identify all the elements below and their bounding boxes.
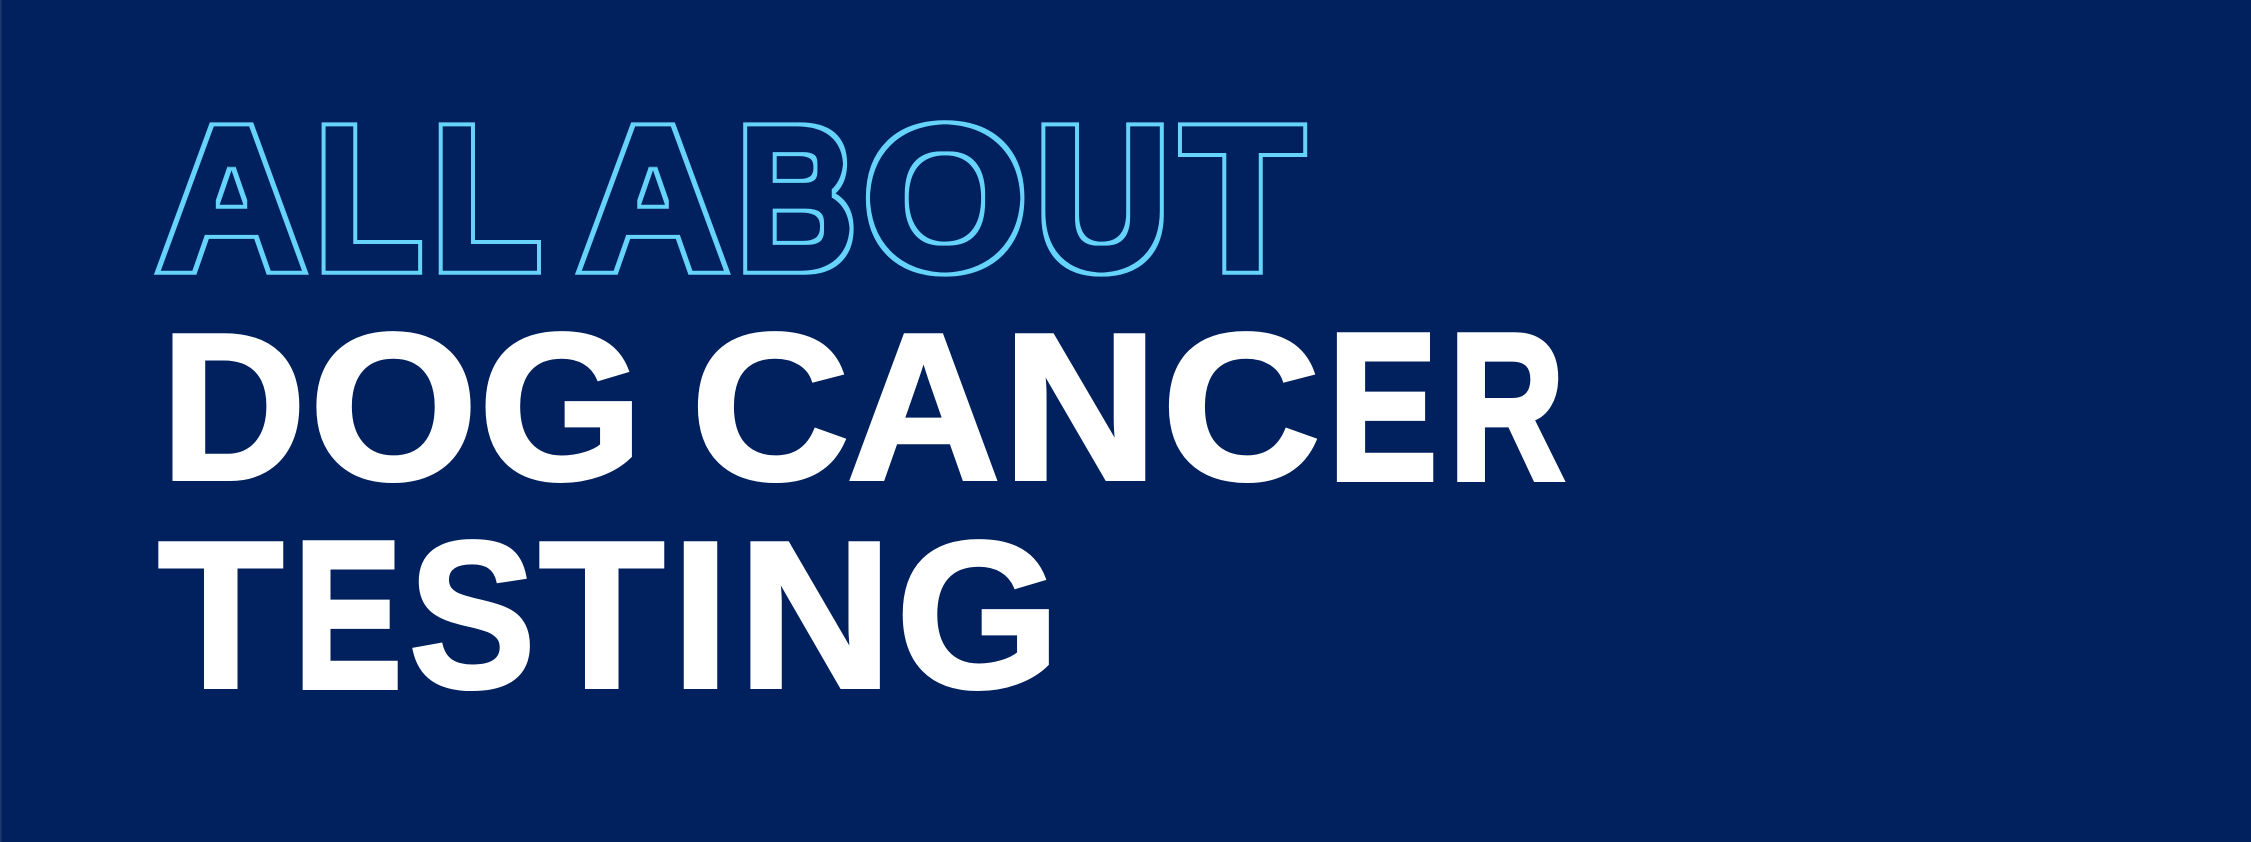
heading line: ALL ABOUT (outlined): L xyxy=(315,85,422,313)
heading line: DOG CANCER: C xyxy=(1162,291,1320,524)
heading line: ALL ABOUT (outlined): T xyxy=(1182,85,1304,313)
heading line: ALL ABOUT (outlined): A xyxy=(157,85,306,313)
heading line: ALL ABOUT (outlined): O xyxy=(863,85,1027,313)
heading line: ALL ABOUT (outlined): L xyxy=(432,85,538,313)
heading line: DOG CANCER: R xyxy=(1449,291,1565,524)
heading line: TESTING: G xyxy=(896,499,1060,732)
heading line: DOG CANCER: O xyxy=(310,291,478,524)
heading line: DOG CANCER: A xyxy=(847,291,1000,524)
heading line: TESTING: S xyxy=(409,499,536,732)
heading line: TESTING: N xyxy=(738,499,892,732)
heading line: ALL ABOUT (outlined): U xyxy=(1036,85,1170,313)
heading line: TESTING: T xyxy=(539,499,664,732)
heading line: DOG CANCER: N xyxy=(1003,291,1158,524)
heading line: DOG CANCER: C xyxy=(691,291,850,524)
heading line: TESTING: T xyxy=(158,499,284,732)
heading line: ALL ABOUT (outlined): B xyxy=(737,85,856,313)
heading line: TESTING: E xyxy=(294,499,402,732)
heading line: DOG CANCER: E xyxy=(1328,291,1437,524)
heading line: ALL ABOUT (outlined): A xyxy=(578,85,728,313)
heading line: DOG CANCER: G xyxy=(479,291,643,524)
heading line: TESTING: I xyxy=(672,499,729,732)
heading line: DOG CANCER: D xyxy=(161,291,306,524)
